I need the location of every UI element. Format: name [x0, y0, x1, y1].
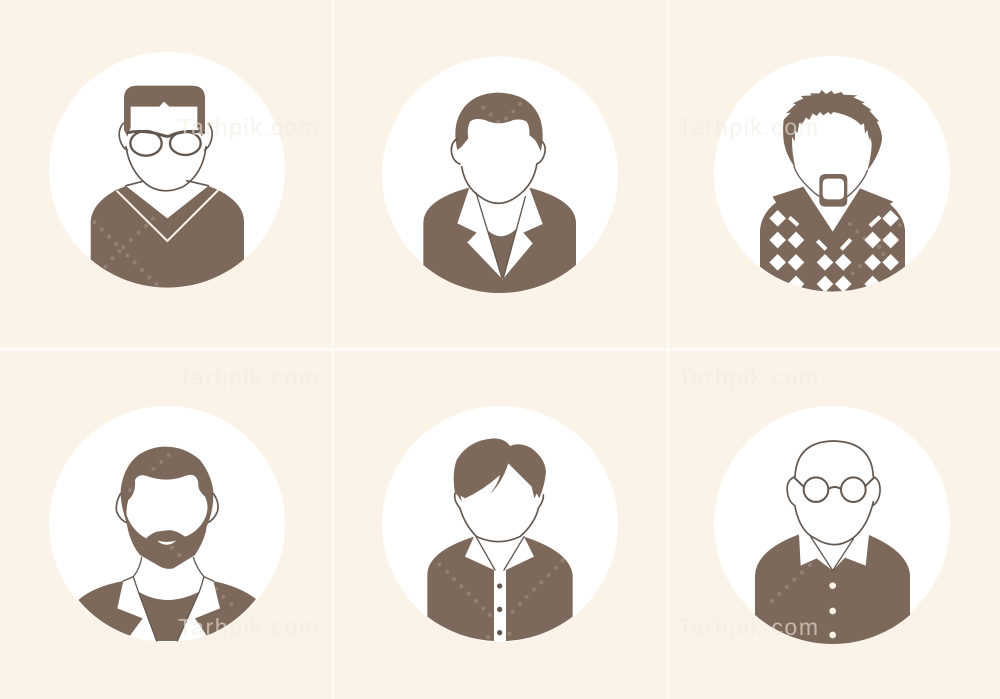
pattern dots — [128, 453, 233, 606]
glasses — [127, 131, 205, 156]
panel: avatar with argyle sweater — [669, 0, 1000, 348]
body: buttoned shirt — [427, 537, 573, 641]
ears — [116, 493, 218, 523]
face outline — [794, 166, 867, 197]
watermarks: Tarhpik.com — [178, 364, 320, 390]
face outline — [455, 493, 543, 542]
face outline — [119, 123, 212, 191]
head outline — [787, 441, 880, 545]
body: argyle sweater — [760, 187, 905, 292]
watermarks: Tarhpik.com — [678, 114, 820, 140]
watermarks: Tarhpik.com — [178, 114, 320, 140]
hair — [455, 93, 543, 152]
hair and beard — [121, 447, 213, 569]
pattern dots — [481, 102, 522, 124]
pattern dots — [437, 558, 565, 639]
pattern dots — [770, 563, 812, 603]
panel: avatar with side-swept hair — [334, 351, 666, 699]
watermarks — [178, 114, 820, 640]
pattern dots — [848, 222, 902, 275]
panel: avatar with beard — [0, 351, 332, 699]
watermarks: Tarhpik.com — [678, 614, 820, 640]
goatee — [819, 174, 847, 207]
buttons — [497, 583, 502, 635]
body: v-neck sweater — [91, 181, 244, 288]
watermarks: Tarhpik.com — [678, 364, 820, 390]
face outline — [451, 138, 545, 203]
panel: bald avatar with round glasses — [669, 351, 1000, 699]
mouth — [157, 541, 176, 545]
body: open jacket — [78, 557, 256, 641]
hair — [124, 86, 205, 137]
body: collared shirt — [755, 534, 910, 644]
round glasses — [795, 477, 873, 502]
hair — [454, 438, 546, 502]
panel: avatar with blazer — [334, 0, 666, 348]
watermarks: Tarhpik.com — [178, 614, 320, 640]
body: jacket with lapels — [423, 188, 576, 293]
hair — [783, 90, 882, 171]
panel: avatar with square glasses — [0, 0, 332, 348]
buttons — [829, 582, 836, 638]
pattern dots — [92, 217, 159, 286]
